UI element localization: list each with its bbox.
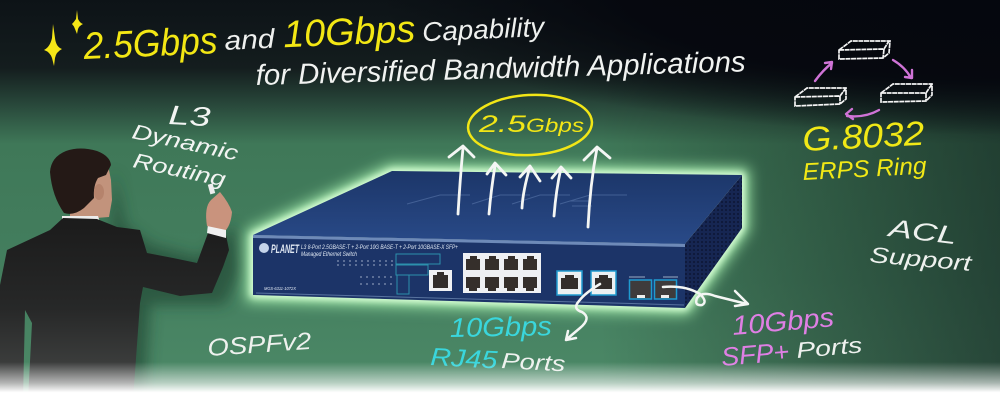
title line one [82,3,547,68]
soft shadow [100,170,240,400]
jacket with raised arm [0,218,229,400]
2.5G RJ45 port block [463,253,541,293]
ear [94,184,104,200]
brand logo: Managed Ethernet Switch [301,252,358,258]
person writing on the board [0,148,240,400]
faint logo on lid [407,195,627,206]
callout: 2.5Gbps ellipse: 2.5 [478,111,527,138]
label: 10Gbps SFP+ Ports [720,302,863,372]
hair [50,148,111,214]
green glow inner [253,171,742,308]
title: sparkles and heading [44,3,746,92]
label: 10Gbps SFP+ Ports: 10Gbps [731,302,835,341]
icon: three chalk switches [795,41,932,106]
front panel [253,235,685,308]
label: L3 Dynamic Routing: L3 [168,100,211,132]
label: L3 Dynamic Routing: Dynamic [130,120,241,165]
brand logo: MGS-6311-10T2X [264,286,297,291]
label: OSPFv2: OSPFv2 [207,328,312,362]
label: 10Gbps RJ45 Ports: RJ45 [430,343,498,375]
arrows: ring direction [815,60,912,119]
title line one: 10Gbps [282,9,416,56]
10G RJ45 ports [557,271,616,295]
title line one: and [224,24,276,56]
label: 10Gbps RJ45 Ports: Ports [501,348,566,376]
arrows: upward chalk arrows [449,146,610,227]
brand logo: L3 8-Port 2.5GBASE-T + 2-Port 10G BASE-T + 2-Port 10GBASE-X SFP+ [301,245,458,251]
shirt cuff [207,224,226,238]
title line two: for Diversified Bandwidth Applications [255,46,746,92]
green glow outer [253,171,742,308]
brand logo: PLANET [271,242,300,256]
label: 10Gbps SFP+ Ports: Ports [795,332,863,363]
arrow: SFP+ to label [663,287,748,306]
title line one: Capability [422,12,546,47]
arrow: 10G RJ45 to label [566,284,600,340]
LED rows [337,261,393,284]
label: ERPS Ring: ERPS Ring [802,153,928,186]
label: 10Gbps SFP+ Ports: SFP+ [720,336,790,372]
hand with chalk [206,192,232,230]
label: ACL Support: Support [869,242,974,276]
console port [429,270,452,291]
label: 10Gbps RJ45 Ports [430,311,566,376]
brand logo [259,242,458,291]
label: 10Gbps RJ45 Ports: 10Gbps [450,311,552,343]
switch with glow [253,171,742,308]
bottom white fade [0,362,1000,400]
title line one: 2.5Gbps [82,20,218,68]
label: G.8032: G.8032 [801,115,925,159]
top surface [253,171,742,244]
callout: 2.5Gbps ellipse [467,92,593,158]
ring diagram: G.8032 [795,41,932,186]
face and neck [70,160,112,220]
label: L3 Dynamic Routing: Routing [131,149,228,192]
label: L3 Dynamic Routing [130,100,241,192]
side panel [685,175,742,308]
label: ACL Support: ACL [884,214,958,250]
callout: 2.5Gbps ellipse: Gbps [526,116,585,137]
icon: yellow sparkles [44,10,83,66]
LED block [396,254,440,294]
front bottom edge [256,293,684,305]
shirt collar [62,216,100,222]
SFP+ cages [629,277,678,299]
front top edge [253,235,685,247]
label: ACL Support [869,214,974,276]
